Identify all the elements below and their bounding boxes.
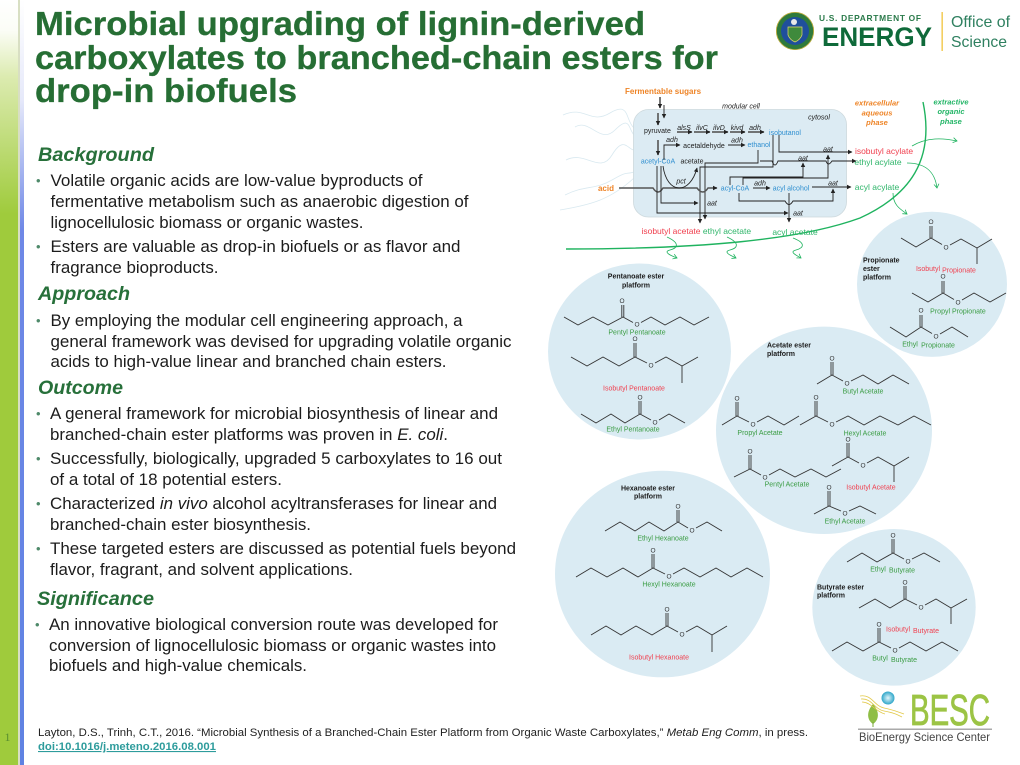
panel: hexanoate ester platform xyxy=(555,471,770,677)
diagram labels: acyl acetate xyxy=(772,227,818,237)
diagram labels: aqueous xyxy=(862,108,892,118)
diagram labels: Fermentable sugars xyxy=(625,87,702,96)
diagram labels: acyl alcohol xyxy=(773,186,810,192)
ethyl propionate: O xyxy=(918,308,924,314)
diagram labels: alsS xyxy=(677,125,691,132)
pentanoate heading: platform xyxy=(622,282,650,290)
diagram labels: ethyl acylate xyxy=(854,157,902,167)
isobutyl hexanoate xyxy=(591,606,727,662)
isobutyl acetate: O xyxy=(845,436,851,444)
ethyl acetate: Ethyl Acetate xyxy=(825,518,866,526)
propyl propionate: O xyxy=(940,274,946,280)
propyl propionate: O xyxy=(955,300,961,306)
pentyl pentanoate xyxy=(564,298,709,336)
diagram labels: acyl acylate xyxy=(855,182,899,192)
pentyl acetate xyxy=(734,448,841,488)
outcome bullets: Characterized in vivo alcohol acyltransferases for linear and xyxy=(50,494,497,513)
background bullets: Volatile organic acids are low-value byproducts of xyxy=(50,171,423,190)
title: drop-in biofuels xyxy=(35,72,297,109)
outcome bullets: • xyxy=(36,541,41,556)
isobutyl propionate: Propionate xyxy=(942,268,976,274)
acetate heading: platform xyxy=(767,351,795,358)
panel: pentanoate ester platform xyxy=(548,264,731,440)
outcome bullets: flavor, fragrant, and solvent applications. xyxy=(50,560,353,579)
page number: 1 xyxy=(4,730,10,744)
hexanoate heading xyxy=(621,486,675,500)
butyl acetate: Butyl Acetate xyxy=(843,388,884,396)
citation: doi:10.1016/j.meteno.2016.08.001 xyxy=(38,741,216,753)
logo: U.S. Department of Energy Office of Science: Science xyxy=(951,34,1007,51)
approach bullets: • xyxy=(36,313,41,328)
heading: background: Background xyxy=(38,144,155,166)
ethyl pentanoate: Ethyl Pentanoate xyxy=(606,426,660,434)
citation: Layton, D.S., Trinh, C.T., 2016. “Microbial Synthesis of a Branched-Chain Ester Platform from Organic Waste Carboxylates,” Metab Eng Comm , in press. xyxy=(38,727,808,739)
outcome bullets: Successfully, biologically, upgraded 5 carboxylates to 16 out xyxy=(50,449,502,468)
diagram labels: isobutyl acylate xyxy=(855,146,913,156)
outcome bullets: • xyxy=(36,406,41,421)
diagram labels: aat xyxy=(828,180,839,188)
background bullets: • xyxy=(36,239,41,254)
diagram labels: cytosol xyxy=(808,114,830,122)
heading: outcome: Outcome xyxy=(38,377,123,399)
diagram labels: extractive xyxy=(933,98,969,106)
propionate heading: platform xyxy=(863,274,891,282)
hexyl acetate: Hexyl Acetate xyxy=(844,430,887,438)
outcome bullets: branched-chain ester biosynthesis. xyxy=(50,515,311,534)
diagram labels: adh xyxy=(749,125,761,132)
outcome bullets: • xyxy=(36,451,41,466)
ethyl acetate: O xyxy=(842,510,848,518)
butyl butyrate: Butyl xyxy=(872,656,888,662)
diagram labels: ethanol xyxy=(748,142,771,149)
diagram labels: pct xyxy=(675,178,687,186)
diagram labels: acetaldehyde xyxy=(683,143,725,150)
isobutyl acetate: O xyxy=(860,462,866,470)
ethyl hexanoate: O xyxy=(689,528,695,534)
isobutyl butyrate: O xyxy=(918,604,924,612)
background bullets xyxy=(36,171,469,277)
ethyl hexanoate xyxy=(605,504,722,542)
butyl butyrate: O xyxy=(892,648,898,654)
approach bullets: By employing the modular cell engineering approach, a xyxy=(50,311,463,330)
propionate heading: Propionate xyxy=(863,258,900,264)
logo: U.S. Department of Energy Office of Science: ENERGY xyxy=(822,22,932,52)
propionate heading: ester xyxy=(863,266,880,273)
panel: acetate ester platform xyxy=(716,327,932,534)
significance bullets: biofuels and high-value chemicals. xyxy=(49,656,307,675)
ethyl butyrate: O xyxy=(890,532,896,540)
propyl acetate: O xyxy=(750,422,756,428)
background bullets: lignocellulosic biomass or organic wastes. xyxy=(50,213,364,232)
diagram labels: aat xyxy=(793,210,804,218)
isobutyl propionate: O xyxy=(928,219,934,226)
isobutyl pentanoate: O xyxy=(632,336,638,343)
pentyl acetate: Pentyl Acetate xyxy=(765,482,809,488)
diagram labels: phase xyxy=(865,118,888,127)
cell membrane waves xyxy=(560,109,634,210)
isobutyl hexanoate: O xyxy=(679,632,685,638)
diagram labels: adh xyxy=(731,138,743,144)
propyl acetate: Propyl Acetate xyxy=(737,430,783,437)
green solvent boundary xyxy=(566,102,926,249)
butyl butyrate xyxy=(832,622,958,664)
isobutyl hexanoate: O xyxy=(664,606,670,614)
acetate heading xyxy=(767,342,811,358)
propyl acetate xyxy=(722,396,799,437)
logo: U.S. Department of Energy Office of Science xyxy=(776,12,1011,52)
logo: BioEnergy Science Center: BioEnergy Science Center xyxy=(859,730,990,744)
pentanoate heading: Pentanoate ester xyxy=(608,274,664,280)
isobutyl butyrate: Isobutyl xyxy=(886,626,911,634)
approach bullets xyxy=(36,311,512,371)
background bullets: fragrance bioproducts. xyxy=(50,258,218,277)
isobutyl butyrate: O xyxy=(902,580,908,586)
ethyl propionate xyxy=(890,308,968,350)
diagram labels: modular cell xyxy=(722,104,760,110)
butyl acetate xyxy=(817,356,909,396)
propyl propionate xyxy=(912,274,1006,316)
ethyl pentanoate xyxy=(581,394,685,434)
diagram labels: ethyl acetate xyxy=(703,226,751,236)
diffusion arrows into organic phase xyxy=(667,139,957,258)
panel: butyrate ester platform xyxy=(812,529,976,686)
isobutyl hexanoate: Isobutyl Hexanoate xyxy=(629,654,689,662)
ethyl acetate: O xyxy=(826,484,832,492)
ethyl butyrate: Ethyl xyxy=(870,566,886,574)
significance bullets: • xyxy=(35,617,40,632)
butyl butyrate: O xyxy=(876,622,882,628)
diagram labels: acid xyxy=(598,184,614,193)
propyl acetate: O xyxy=(734,396,740,402)
pentyl acetate: O xyxy=(762,474,768,482)
outcome bullets xyxy=(36,404,516,579)
ethyl hexanoate: Ethyl Hexanoate xyxy=(637,536,689,542)
title: Microbial upgrading of lignin-derived xyxy=(35,5,645,42)
hexyl acetate: O xyxy=(813,394,819,402)
isobutyl acetate xyxy=(832,436,909,492)
background bullets: Esters are valuable as drop-in biofuels or as flavor and xyxy=(50,237,460,256)
metabolic arrows xyxy=(619,97,856,223)
acetate heading: Acetate ester xyxy=(767,342,811,350)
ethyl pentanoate: O xyxy=(652,420,658,426)
diagram labels: aat xyxy=(823,146,834,154)
diagram labels: ilvD xyxy=(713,125,725,132)
hexyl acetate xyxy=(800,394,931,438)
panel: summary text xyxy=(35,144,516,675)
logo: BioEnergy Science Center xyxy=(858,686,992,744)
diagram labels: pyruvate xyxy=(644,128,671,135)
title xyxy=(35,5,718,109)
pentanoate heading xyxy=(608,274,664,290)
isobutyl butyrate xyxy=(859,580,967,635)
diagram labels: aat xyxy=(798,156,809,162)
diagram labels: phase xyxy=(939,117,962,126)
diagram labels: adh xyxy=(754,180,766,188)
isobutyl propionate: Isobutyl xyxy=(916,266,941,273)
diagram labels: extracellular xyxy=(855,98,900,108)
ethyl butyrate xyxy=(847,532,940,574)
ethyl propionate: O xyxy=(933,334,939,340)
propyl propionate: Propyl Propionate xyxy=(930,308,986,316)
isobutyl propionate: O xyxy=(943,244,949,252)
diagram labels xyxy=(598,87,969,237)
significance bullets xyxy=(35,615,498,675)
pentyl pentanoate: O xyxy=(619,298,625,305)
isobutyl pentanoate xyxy=(571,336,698,392)
hexanoate heading: Hexanoate ester xyxy=(621,486,675,492)
ethyl butyrate: O xyxy=(905,558,911,566)
ethyl propionate: Ethyl xyxy=(902,342,918,348)
ethyl hexanoate: O xyxy=(675,504,681,510)
outcome bullets: A general framework for microbial biosynthesis of linear and xyxy=(50,404,498,423)
pentyl pentanoate: O xyxy=(634,322,640,328)
isobutyl pentanoate: O xyxy=(648,362,654,370)
hexyl hexanoate xyxy=(576,548,763,588)
isobutyl pentanoate: Isobutyl Pentanoate xyxy=(603,386,665,392)
heading: approach: Approach xyxy=(37,283,130,305)
heading: significance: Significance xyxy=(37,588,154,610)
logo: U.S. Department of Energy Office of Science: U.S. DEPARTMENT OF xyxy=(819,13,921,23)
background bullets: • xyxy=(36,173,41,188)
diagram labels: aat xyxy=(707,200,718,208)
diagram labels: organic xyxy=(937,107,965,116)
butyrate heading: platform xyxy=(817,592,845,600)
ethyl butyrate: Butyrate xyxy=(889,568,915,574)
outcome bullets: • xyxy=(36,496,41,511)
butyl butyrate: Butyrate xyxy=(891,657,917,664)
diagram labels: kivd xyxy=(731,125,744,132)
ethyl acetate xyxy=(814,484,876,526)
citation xyxy=(38,727,808,753)
isobutyl acetate: Isobutyl Acetate xyxy=(846,484,896,492)
diagram labels: adh xyxy=(666,137,678,144)
isobutyl propionate xyxy=(901,219,992,274)
left sidebar strip xyxy=(0,0,24,765)
significance bullets: An innovative biological conversion route was developed for xyxy=(49,615,498,634)
background bullets: fermentative metabolism such as anaerobic digestion of xyxy=(50,192,469,211)
hexyl hexanoate: O xyxy=(666,574,672,580)
hexanoate heading: platform xyxy=(634,494,662,500)
outcome bullets: branched-chain ester platforms was proven in E. coli. xyxy=(50,425,448,444)
diagram labels: ilvC xyxy=(696,125,709,132)
butyl acetate: O xyxy=(844,380,850,388)
diagram labels: isobutyl acetate xyxy=(641,226,701,236)
ethyl pentanoate: O xyxy=(637,394,643,402)
approach bullets: general framework was devised for upgrading volatile organic xyxy=(50,332,512,351)
isobutyl butyrate: Butyrate xyxy=(913,628,939,635)
logo: U.S. Department of Energy Office of Science: Office of xyxy=(951,14,1011,31)
outcome bullets: These targeted esters are discussed as potential fuels beyond xyxy=(50,539,516,558)
panel: propionate ester platform xyxy=(857,212,1007,357)
butyrate heading xyxy=(817,584,864,600)
diagram labels: acetyl-CoA xyxy=(641,158,675,166)
butyrate heading: Butyrate ester xyxy=(817,584,864,592)
significance bullets: conversion of lignocellulosic biomass or organic wastes into xyxy=(49,636,496,655)
butyl acetate: O xyxy=(829,356,835,362)
diagram labels: isobutanol xyxy=(769,130,801,137)
approach bullets: acids to high-value linear and branched chain esters. xyxy=(50,352,446,371)
hexyl acetate: O xyxy=(829,422,835,428)
pathway diagram xyxy=(560,87,969,258)
pentyl pentanoate: Pentyl Pentanoate xyxy=(608,330,666,336)
hexyl hexanoate: Hexyl Hexanoate xyxy=(642,582,696,588)
modular cell box xyxy=(634,110,846,217)
ethyl propionate: Propionate xyxy=(921,342,955,350)
outcome bullets: of a total of 18 potential esters. xyxy=(50,470,282,489)
pentyl acetate: O xyxy=(747,448,753,456)
title: carboxylates to branched-chain esters for xyxy=(35,39,718,76)
diagram labels: acyl-CoA xyxy=(721,186,750,192)
hexyl hexanoate: O xyxy=(650,548,656,554)
diagram labels: acetate xyxy=(681,158,704,166)
